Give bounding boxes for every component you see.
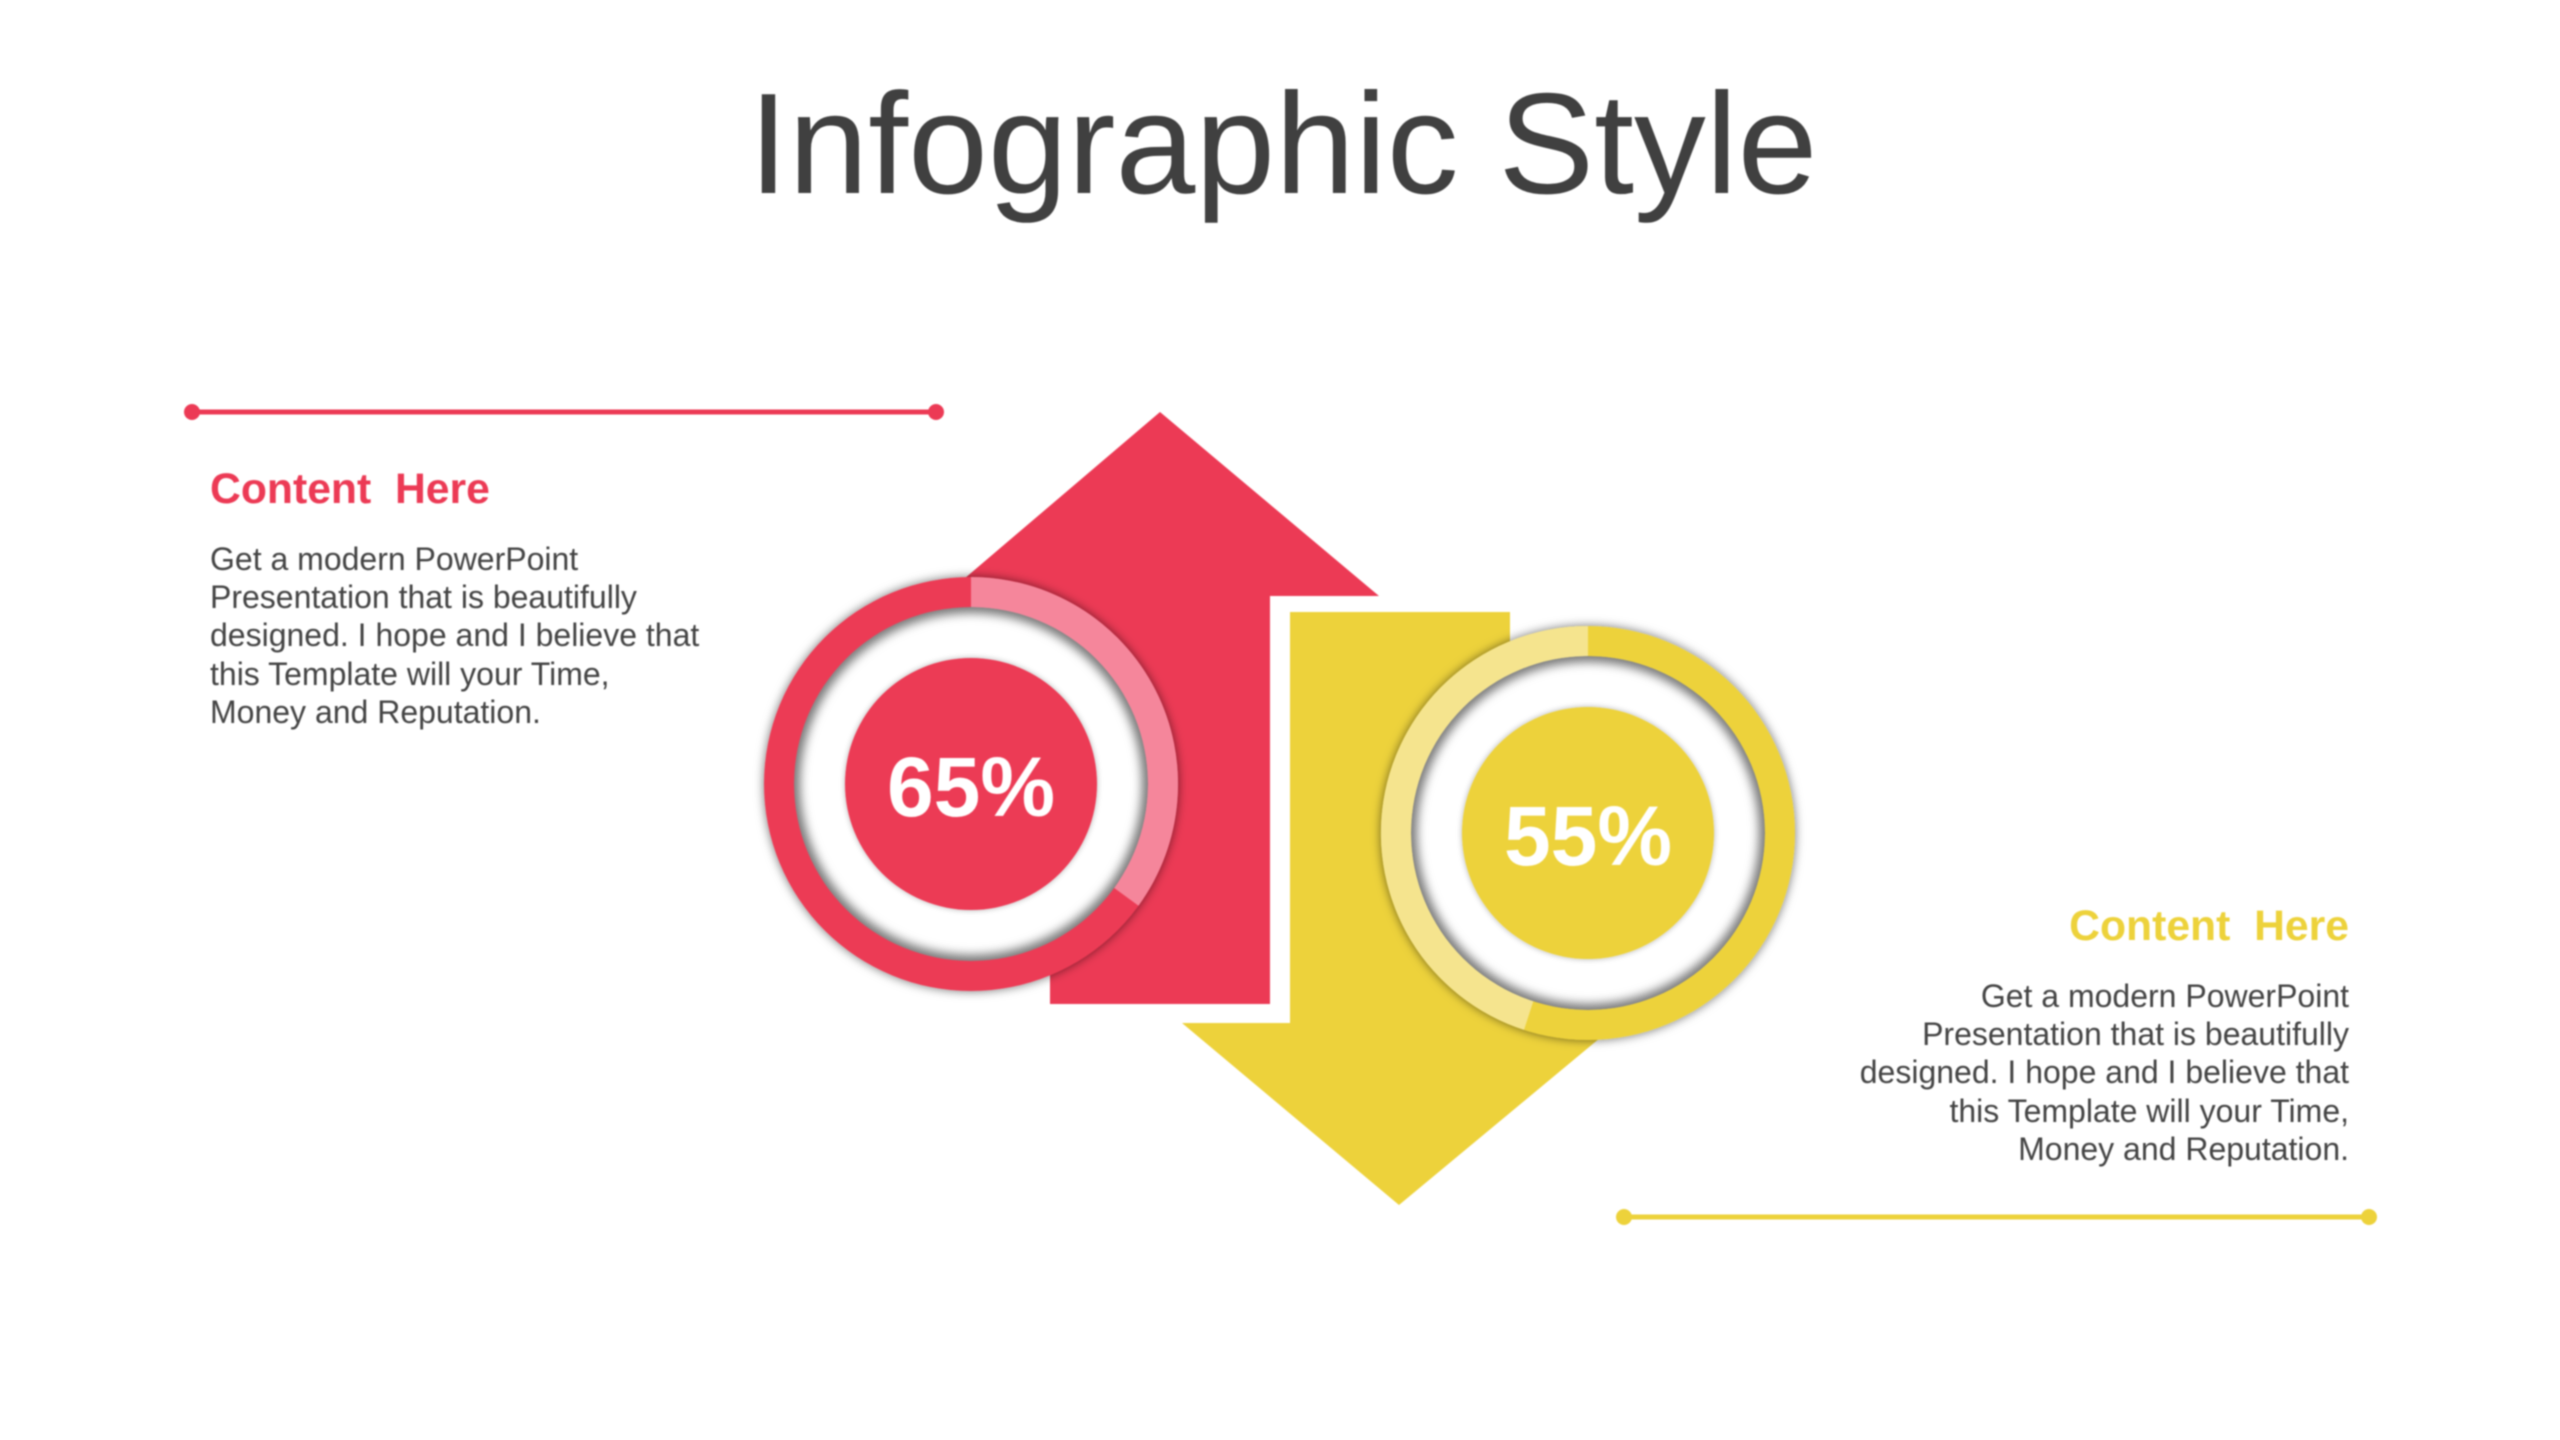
- panel: right content: [1616, 902, 2377, 1225]
- panel: left content: [184, 404, 944, 730]
- heading: right: Content Here: [2069, 902, 2349, 950]
- gauge: 55 percent: [1381, 626, 1795, 1040]
- value: 55%: 55%: [1504, 789, 1672, 883]
- title: Infographic Style: [749, 64, 1817, 224]
- rule: red line with dots: [184, 404, 944, 420]
- text block: left: designed. I hope and I believe that: [210, 617, 699, 653]
- arc: remaining 45 percent: [1381, 626, 1588, 1030]
- text block: right: Get a modern PowerPoint: [1981, 978, 2349, 1014]
- arrow: red up: [944, 412, 1379, 1004]
- text block: right: designed. I hope and I believe that: [1860, 1054, 2349, 1090]
- value: 65%: 65%: [887, 740, 1055, 834]
- ring: white inner disc: [794, 607, 1148, 961]
- text block: left: Presentation that is beautifully: [210, 579, 637, 615]
- arc: remaining 35 percent: [971, 577, 1178, 906]
- text block: right: Presentation that is beautifully: [1922, 1016, 2349, 1052]
- ring: white inner disc: [1411, 656, 1765, 1010]
- text block: right: Money and Reputation.: [2018, 1131, 2349, 1167]
- text block: right: this Template will your Time,: [1949, 1093, 2349, 1129]
- text block: left: this Template will your Time,: [210, 656, 610, 692]
- heading: left: Content Here: [210, 465, 490, 513]
- text block: left: Get a modern PowerPoint: [210, 541, 578, 577]
- text block: left: Money and Reputation.: [210, 694, 541, 730]
- circle: yellow centre: [1462, 707, 1714, 959]
- rule: yellow line with dots: [1616, 1209, 2377, 1225]
- arrow: yellow down: [1182, 612, 1618, 1205]
- gauge: 65 percent: [764, 577, 1178, 991]
- circle: red centre: [845, 658, 1097, 910]
